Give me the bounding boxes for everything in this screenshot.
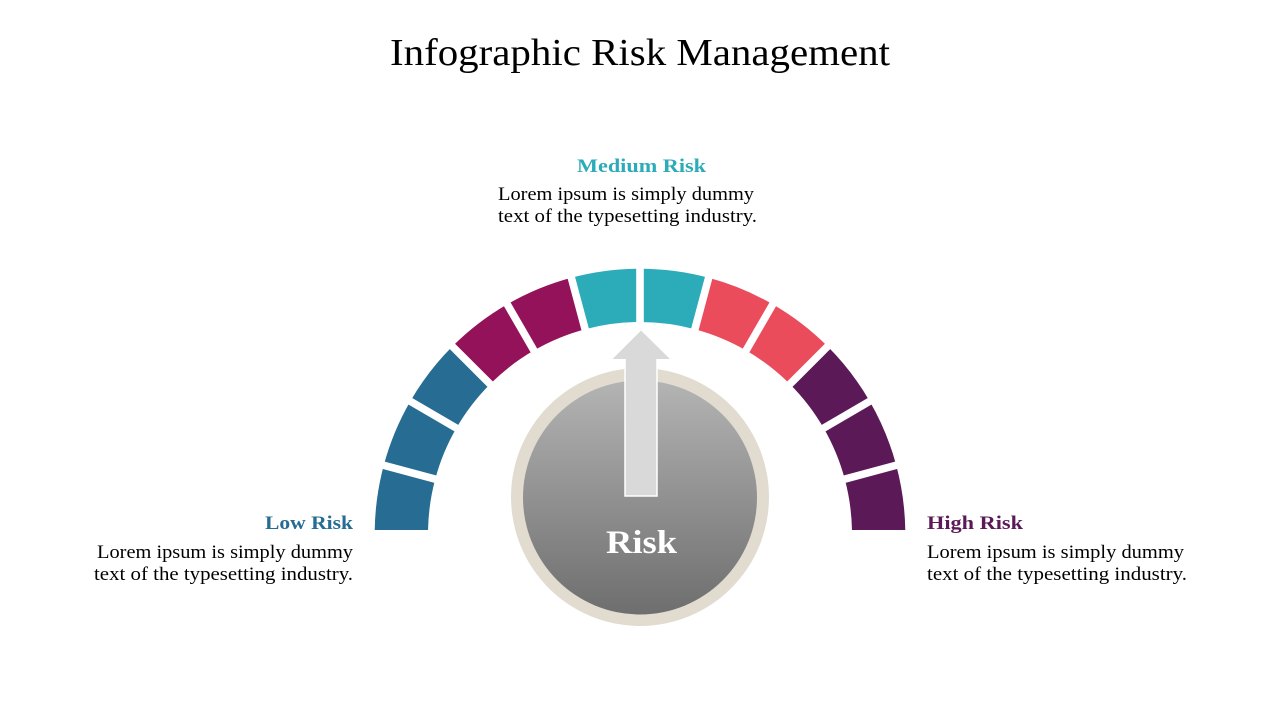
text block: high risk: High Risk bbox=[927, 513, 1023, 534]
text block: low risk bbox=[94, 513, 354, 585]
upper-medium risk segments bbox=[695, 278, 828, 384]
text block: high risk: text of the typesetting industry. bbox=[927, 564, 1187, 585]
medium risk segments bbox=[571, 269, 709, 329]
text block: medium risk: Lorem ipsum is simply dummy bbox=[498, 184, 755, 205]
text block: low risk: Lorem ipsum is simply dummy bbox=[97, 542, 354, 563]
dial ring bbox=[511, 368, 769, 626]
text block: low risk: Low Risk bbox=[265, 513, 353, 534]
text block: medium risk bbox=[498, 156, 757, 227]
low risk segments bbox=[375, 346, 490, 530]
arrow pointer bbox=[612, 330, 670, 496]
text block: medium risk: Medium Risk bbox=[577, 156, 706, 177]
title: Infographic Risk Management bbox=[390, 32, 890, 74]
dial face bbox=[523, 380, 757, 614]
lower-medium risk segments bbox=[452, 278, 585, 384]
text block: medium risk: text of the typesetting industry. bbox=[498, 206, 757, 227]
text block: low risk: text of the typesetting industry. bbox=[94, 564, 353, 585]
dial label: Risk bbox=[606, 525, 678, 561]
semicircular risk gauge bbox=[375, 262, 905, 530]
text block: high risk: Lorem ipsum is simply dummy bbox=[927, 542, 1185, 563]
text block: high risk bbox=[927, 513, 1187, 585]
high risk segments bbox=[790, 346, 905, 530]
